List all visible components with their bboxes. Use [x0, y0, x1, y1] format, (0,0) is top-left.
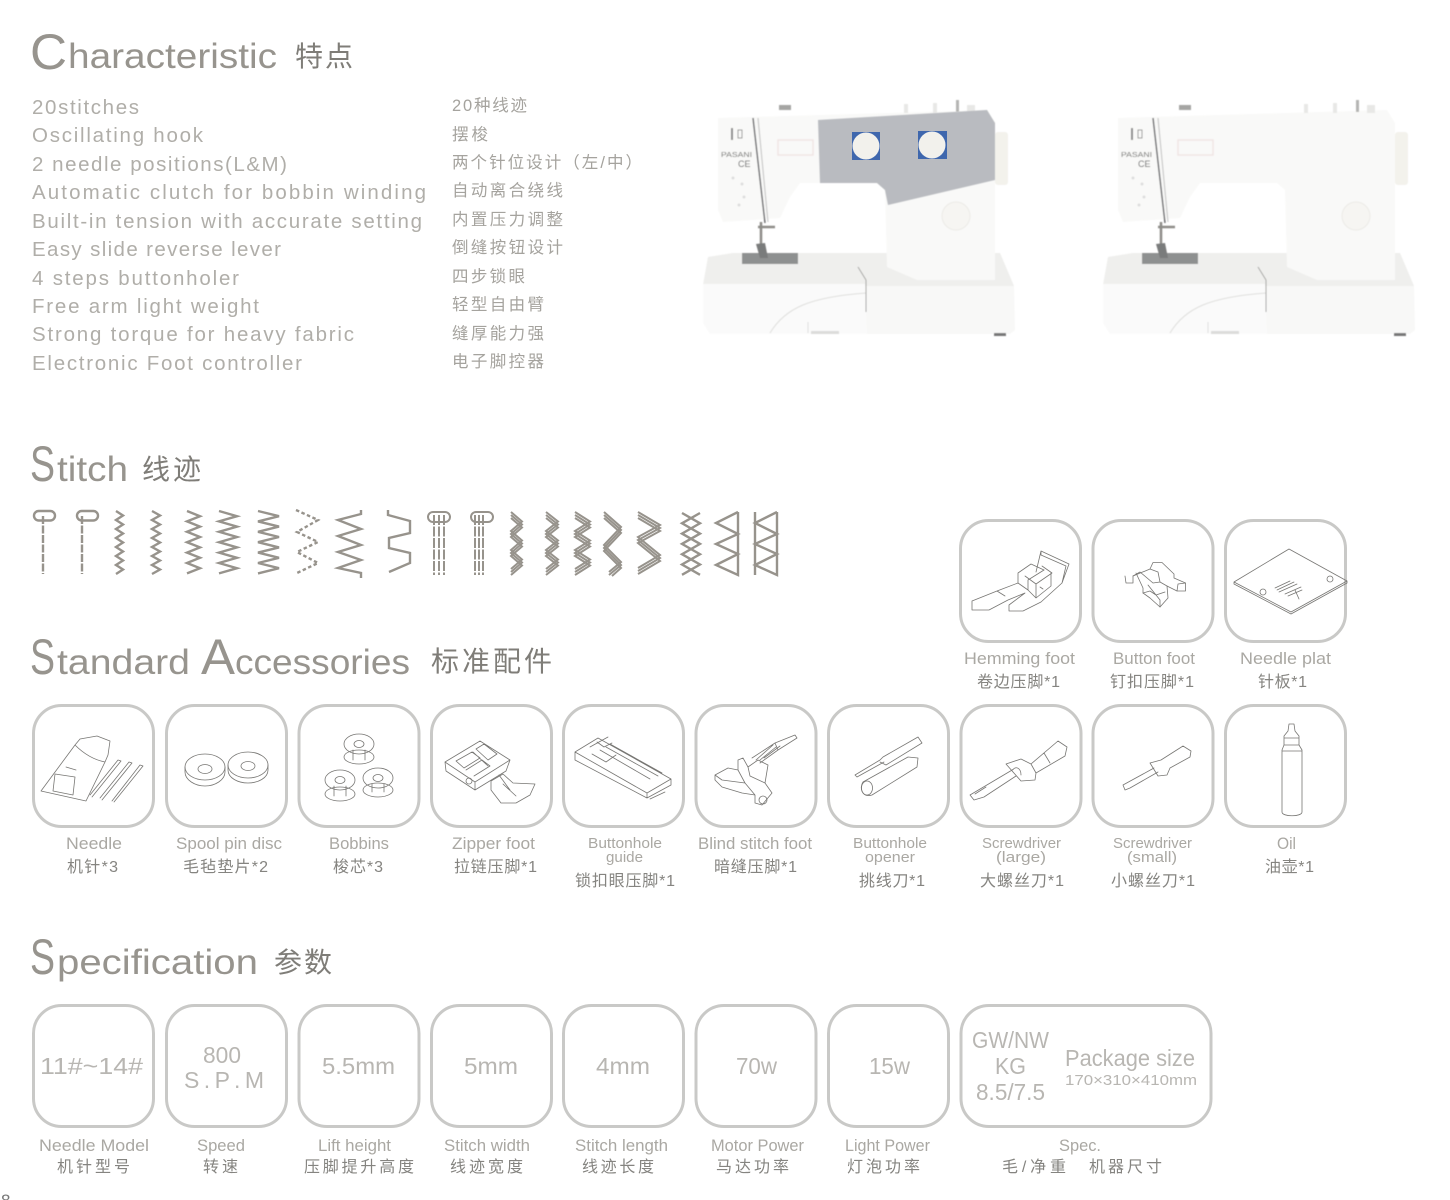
label	[66, 835, 122, 876]
label: Screwdriver	[982, 835, 1061, 852]
section: characteristic	[30, 24, 1415, 375]
spec: stitch width: 线迹宽度	[450, 1158, 523, 1176]
image: sewing machine with highlighted panel	[703, 100, 1015, 336]
heading: Characteristic	[30, 24, 353, 80]
spec: motor power: 马达功率	[716, 1158, 789, 1176]
spec: motor power: 70w	[736, 1053, 777, 1079]
text block: feature list in English: Easy slide reverse lever	[32, 238, 281, 261]
heading: Stitch: 线迹	[142, 454, 201, 485]
label: Bobbins	[329, 835, 389, 853]
card: small screwdriver	[1093, 706, 1213, 890]
spec: weight and package size: KG	[995, 1053, 1026, 1079]
label: 暗缝压脚*1	[714, 858, 797, 876]
spec: weight and package size: 机器尺寸	[1089, 1158, 1162, 1176]
heading: Standard Accessories: tandard	[57, 643, 190, 682]
heading: Specification: S	[30, 929, 55, 985]
text block: feature list in English: Automatic clutch for bobbin winding	[32, 181, 426, 204]
label: 油壶*1	[1265, 858, 1314, 876]
card: hemming foot	[960, 520, 1080, 691]
label: 钉扣压脚*1	[1110, 673, 1194, 691]
label	[1265, 835, 1314, 876]
spec: light power	[828, 1006, 948, 1176]
spec: weight and package size	[961, 1006, 1211, 1176]
label: 拉链压脚*1	[454, 858, 537, 876]
heading: Standard Accessories: ccessories	[235, 643, 410, 682]
text block: feature list in English: 2 needle positions(L&M)	[32, 153, 287, 176]
spec: lift height	[299, 1006, 419, 1176]
label: guide	[606, 849, 643, 866]
icon: buttonhole guide	[575, 737, 671, 799]
heading: Characteristic: C	[30, 24, 67, 80]
text block: feature list in English: Free arm light weight	[32, 295, 259, 318]
heading: Standard Accessories: S	[30, 629, 55, 685]
spec: light power: 15w	[869, 1053, 910, 1079]
label: (large)	[996, 849, 1046, 866]
heading: Specification	[30, 929, 332, 985]
section: stitch	[30, 436, 777, 578]
icon: spool discs	[185, 752, 268, 786]
card: blind stitch foot	[696, 706, 816, 876]
text block: feature list in English: Strong torque for heavy fabric	[32, 323, 354, 346]
spec: needle model: 机针型号	[57, 1158, 130, 1176]
spec: lift height: 压脚提升高度	[304, 1158, 414, 1176]
label: 针板*1	[1258, 673, 1307, 691]
icon: hemming foot	[972, 551, 1069, 611]
spec: weight and package size: Spec.	[1059, 1137, 1101, 1155]
spec: needle model: 11#~14#	[40, 1053, 143, 1079]
label: 卷边压脚*1	[977, 673, 1060, 691]
text block: feature list in Chinese: 20种线迹	[452, 96, 527, 115]
label: 机针*3	[67, 858, 118, 876]
label: Needle plat	[1240, 650, 1331, 668]
icon: oil bottle	[1282, 724, 1302, 816]
label: 锁扣眼压脚*1	[575, 872, 675, 890]
label: Buttonhole	[853, 835, 927, 852]
label: Hemming foot	[964, 650, 1075, 668]
card: oil	[1226, 706, 1346, 876]
label: Oil	[1277, 835, 1296, 853]
spec: light power: Light Power	[845, 1137, 930, 1155]
card: buttonhole guide	[564, 706, 684, 890]
label: Screwdriver	[1113, 835, 1192, 852]
icon: button foot	[1125, 562, 1186, 607]
label: (small)	[1127, 849, 1177, 866]
card: zipper foot	[432, 706, 552, 876]
card: needle	[34, 706, 154, 876]
text block: feature list in Chinese: 自动离合绕线	[452, 181, 563, 200]
section: standard accessories	[30, 520, 1347, 890]
spec: speed: Speed	[197, 1137, 245, 1155]
icon: small screwdriver	[1123, 746, 1191, 790]
text block: feature list in Chinese	[452, 96, 642, 371]
label: Buttonhole	[588, 835, 662, 852]
spec: weight and package size: 毛/净重	[1002, 1158, 1066, 1176]
label	[853, 835, 927, 890]
label: opener	[865, 849, 915, 866]
label	[452, 835, 537, 876]
spec: stitch length: Stitch length	[575, 1137, 668, 1155]
chart: stitch pattern row	[34, 510, 777, 578]
spec: weight and package size: GW/NW	[972, 1027, 1049, 1053]
label	[329, 835, 389, 876]
image: sewing machine plain	[1103, 100, 1415, 336]
heading: Stitch: S	[30, 436, 55, 492]
icon: zipper foot	[445, 741, 535, 803]
label	[1110, 650, 1195, 691]
spec: stitch width: Stitch width	[444, 1137, 530, 1155]
label	[980, 835, 1064, 890]
text block: feature list in Chinese: 摆梭	[452, 125, 488, 144]
text block: feature list in Chinese: 缝厚能力强	[452, 324, 544, 343]
spec: needle model	[34, 1006, 154, 1176]
text block: feature list in English: Oscillating hook	[32, 124, 204, 147]
label: Needle	[66, 835, 122, 853]
icon: blind stitch foot	[715, 735, 797, 805]
text block: feature list in English: Built-in tension with accurate setting	[32, 210, 422, 233]
label: 大螺丝刀*1	[980, 872, 1064, 890]
spec: stitch width	[432, 1006, 552, 1176]
card: spool pin disc	[166, 706, 286, 876]
spec: motor power: Motor Power	[711, 1137, 805, 1155]
section: specification	[30, 929, 1211, 1176]
label	[1111, 835, 1195, 890]
label: 挑线刀*1	[859, 872, 925, 890]
text block: feature list in English	[32, 96, 426, 375]
spec: stitch length	[564, 1006, 684, 1176]
heading: Specification: pecification	[57, 943, 258, 982]
text block: feature list in Chinese: 倒缝按钮设计	[452, 238, 563, 257]
text block: feature list in English: 4 steps buttonholer	[32, 267, 239, 290]
spec: weight and package size: 170×310×410mm	[1065, 1072, 1197, 1089]
label	[575, 835, 675, 890]
spec: lift height: 5.5mm	[322, 1053, 395, 1079]
heading: Characteristic: haracteristic	[68, 37, 277, 76]
label	[1240, 650, 1331, 691]
card: bobbins	[299, 706, 419, 876]
icon: needle packet	[41, 736, 143, 802]
text block: feature list in Chinese: 四步锁眼	[452, 267, 525, 286]
card: button foot	[1093, 520, 1213, 691]
card: needle plate	[1226, 520, 1347, 691]
text block: feature list in English: Electronic Foot controller	[32, 352, 302, 375]
text block: feature list in Chinese: 轻型自由臂	[452, 295, 544, 314]
heading: Standard Accessories	[30, 629, 552, 685]
heading: Stitch	[30, 436, 201, 492]
spec: stitch length: 线迹长度	[582, 1158, 654, 1176]
text block: feature list in Chinese: 内置压力调整	[452, 210, 563, 229]
text block: feature list in Chinese: 电子脚控器	[452, 352, 544, 371]
label: Blind stitch foot	[698, 835, 812, 853]
heading: Specification: 参数	[274, 947, 332, 978]
text block: feature list in Chinese: 两个针位设计（左/中）	[452, 153, 642, 172]
icon: buttonhole opener	[855, 737, 922, 796]
icon: needle plate	[1234, 549, 1347, 614]
label: Spool pin disc	[176, 835, 282, 853]
spec: weight and package size: Package size	[1065, 1045, 1195, 1071]
icon: bobbins	[325, 734, 393, 801]
card: buttonhole opener	[828, 706, 948, 890]
spec: weight and package size: 8.5/7.5	[976, 1079, 1045, 1105]
spec: light power: 灯泡功率	[847, 1158, 920, 1176]
heading: Standard Accessories: 标准配件	[431, 646, 552, 677]
label	[964, 650, 1075, 691]
heading: Characteristic: 特点	[295, 41, 353, 72]
heading: Stitch: titch	[57, 450, 128, 489]
spec: lift height: Lift height	[318, 1137, 391, 1155]
spec: stitch width: 5mm	[464, 1053, 518, 1079]
text block: feature list in English: 20stitches	[32, 96, 139, 119]
spec: speed	[166, 1006, 286, 1176]
label	[698, 835, 812, 876]
spec: needle model: Needle Model	[39, 1137, 149, 1155]
heading: Standard Accessories: A	[201, 629, 236, 685]
label: 小螺丝刀*1	[1111, 872, 1195, 890]
label	[176, 835, 282, 876]
spec: motor power	[696, 1006, 816, 1176]
spec: stitch length: 4mm	[596, 1053, 650, 1079]
card: large screwdriver	[961, 706, 1081, 890]
spec: speed: 转速	[203, 1158, 238, 1176]
spec: speed: S . P . M	[184, 1067, 264, 1093]
label: 毛毡垫片*2	[183, 858, 268, 876]
label: Zipper foot	[452, 835, 535, 853]
spec: speed: 800	[203, 1042, 241, 1068]
icon: large screwdriver	[970, 741, 1067, 800]
label: 梭芯*3	[333, 858, 383, 876]
label: Button foot	[1113, 650, 1195, 668]
